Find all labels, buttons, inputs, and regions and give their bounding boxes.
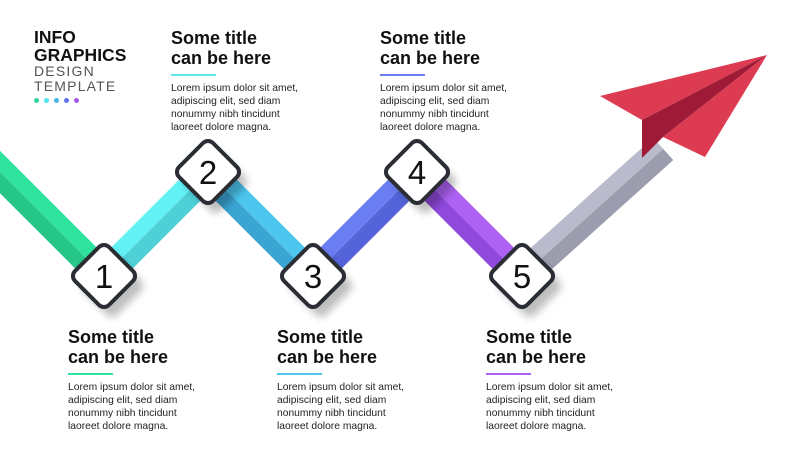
marker 5: 5 — [513, 258, 531, 295]
text block 5: nonummy nibh tincidunt — [486, 408, 595, 419]
text block 5: can be here — [486, 347, 586, 367]
marker 2: 2 — [199, 154, 217, 191]
text block 1 — [68, 327, 195, 432]
text block 3: can be here — [277, 347, 377, 367]
header: infographics design template: GRAPHICS — [34, 45, 126, 65]
marker 4 — [383, 138, 459, 216]
header: infographics design template: INFO — [34, 27, 76, 47]
step markers — [70, 138, 564, 320]
text block 1: adipiscing elit, sed diam — [68, 395, 177, 406]
text block 5: Lorem ipsum dolor sit amet, — [486, 382, 613, 393]
text block 3: laoreet dolore magna. — [277, 421, 377, 432]
text block 1: nonummy nibh tincidunt — [68, 408, 177, 419]
marker 5 — [488, 242, 564, 320]
text block 1: Lorem ipsum dolor sit amet, — [68, 382, 195, 393]
text block 2: can be here — [171, 48, 271, 68]
text block 5: adipiscing elit, sed diam — [486, 395, 595, 406]
marker 2 — [174, 138, 250, 216]
text block 2: adipiscing elit, sed diam — [171, 96, 280, 107]
text block 2: nonummy nibh tincidunt — [171, 109, 280, 120]
text block 3: Some title — [277, 327, 363, 347]
text block 3: adipiscing elit, sed diam — [277, 395, 386, 406]
text block 2 — [171, 28, 298, 133]
text block 1: can be here — [68, 347, 168, 367]
text block 3 — [277, 327, 404, 432]
text block 4: Lorem ipsum dolor sit amet, — [380, 83, 507, 94]
text block 4: laoreet dolore magna. — [380, 122, 480, 133]
header: infographics design template: DESIGN — [34, 63, 95, 79]
text block 2: Lorem ipsum dolor sit amet, — [171, 83, 298, 94]
icon: paper plane — [600, 55, 767, 158]
text block 5: Some title — [486, 327, 572, 347]
text block 2: laoreet dolore magna. — [171, 122, 271, 133]
text block 4 — [380, 28, 507, 133]
text block 4: Some title — [380, 28, 466, 48]
text block 4: can be here — [380, 48, 480, 68]
text block 1: Some title — [68, 327, 154, 347]
bar segments — [0, 121, 673, 288]
text block 4: adipiscing elit, sed diam — [380, 96, 489, 107]
text block 3: Lorem ipsum dolor sit amet, — [277, 382, 404, 393]
header: infographics design template: TEMPLATE — [34, 78, 116, 94]
marker 4: 4 — [408, 154, 426, 191]
marker 3 — [279, 242, 355, 320]
marker 3: 3 — [304, 258, 322, 295]
text block 4: nonummy nibh tincidunt — [380, 109, 489, 120]
header: infographics design template — [34, 27, 126, 103]
text block 5 — [486, 327, 613, 432]
marker 1: 1 — [95, 258, 113, 295]
text block 1: laoreet dolore magna. — [68, 421, 168, 432]
marker 1 — [70, 242, 146, 320]
text block 3: nonummy nibh tincidunt — [277, 408, 386, 419]
text block 2: Some title — [171, 28, 257, 48]
text block 5: laoreet dolore magna. — [486, 421, 586, 432]
